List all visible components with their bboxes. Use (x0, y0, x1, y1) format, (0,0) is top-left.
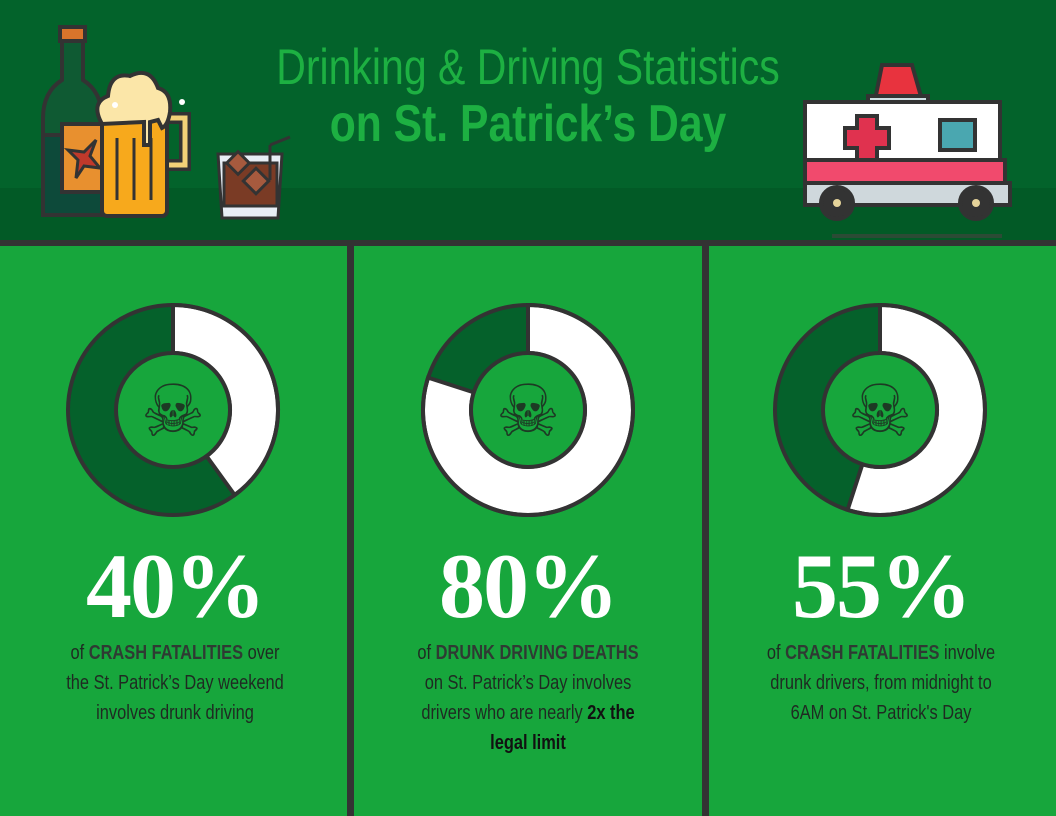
stat 2 number: 80% (439, 535, 617, 637)
stat 2 text: drivers who are nearly 2x the (421, 702, 635, 724)
stat 1 text (66, 642, 284, 724)
stat 1 text: the St. Patrick’s Day weekend (66, 672, 284, 694)
stat 3 text (767, 642, 995, 724)
stat 1 text: involves drunk driving (96, 702, 254, 724)
icon: skulls: ☠ (141, 369, 205, 453)
stat 2 text (417, 642, 639, 754)
stat 3 number: 55% (792, 535, 970, 637)
header background (0, 0, 1056, 240)
donut 3: 55% (775, 305, 985, 515)
stat 3 text: drunk drivers, from midnight to (770, 672, 992, 694)
stat 3 text: of CRASH FATALITIES involve (767, 642, 995, 664)
dividers (347, 246, 354, 816)
charts: donuts (66, 303, 987, 517)
stat 3 text: 6AM on St. Patrick's Day (791, 702, 971, 724)
subtitle: on St. Patrick’s Day (330, 95, 726, 153)
icon: ambulance (803, 63, 1012, 238)
icon: drinks (41, 25, 290, 220)
donut 2: 80% (423, 305, 633, 515)
donut 1: 40% (68, 305, 278, 515)
icon: skulls (141, 369, 912, 453)
icon: bottle (43, 27, 107, 215)
stat 1 text: of CRASH FATALITIES over (71, 642, 279, 664)
stat 1 number: 40% (86, 535, 264, 637)
icon: skulls: ☠ (496, 369, 560, 453)
stat 2 text: of DRUNK DRIVING DEATHS (417, 642, 639, 664)
icon: beer mug (97, 73, 185, 216)
icon: whiskey glass (218, 137, 290, 218)
icon: skulls: ☠ (848, 369, 912, 453)
title: Drinking & Driving Statistics (276, 39, 780, 95)
stat 2 text: legal limit (490, 732, 566, 754)
stat 2 text: on St. Patrick’s Day involves (425, 672, 631, 694)
